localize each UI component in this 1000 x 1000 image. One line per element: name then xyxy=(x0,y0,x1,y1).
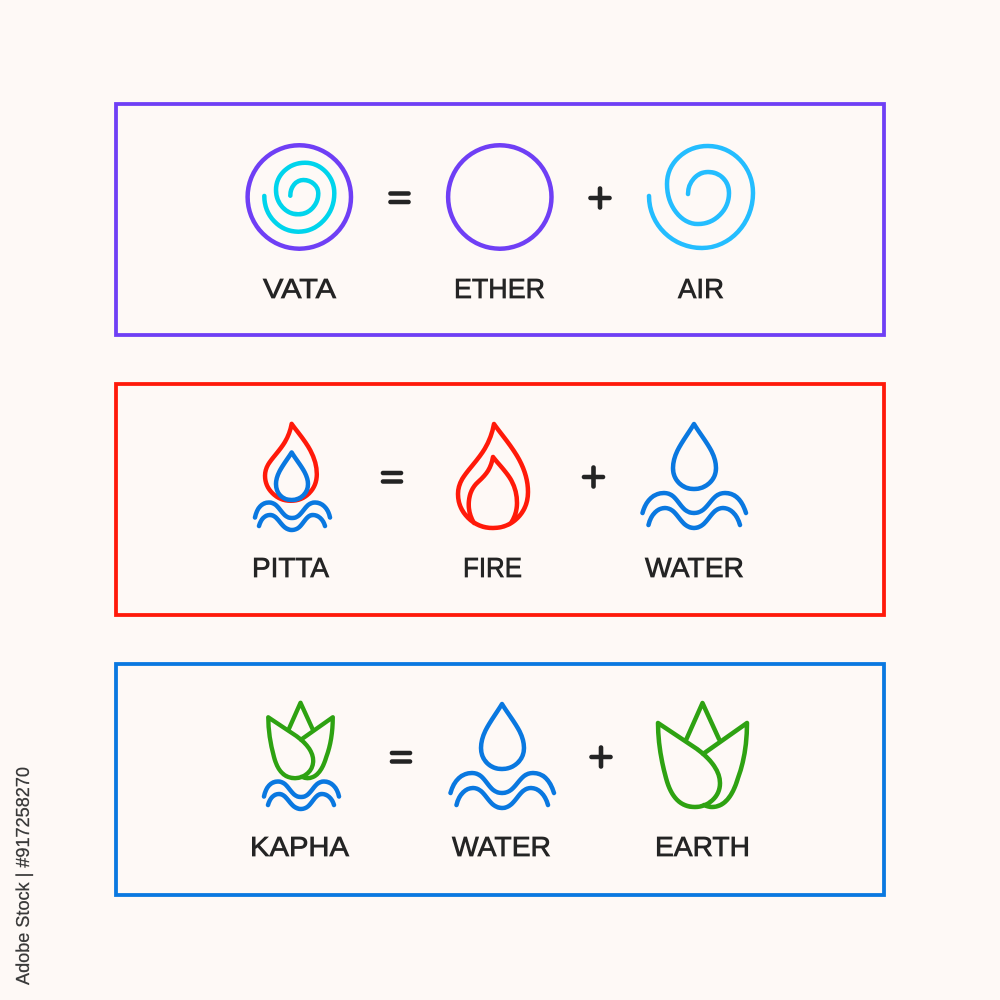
panel: vata xyxy=(116,104,884,335)
label: ether: ETHER xyxy=(454,273,545,304)
label: pitta: PITTA xyxy=(252,552,329,583)
label: water: WATER xyxy=(452,831,551,862)
icon: water xyxy=(642,424,746,528)
label: kapha: KAPHA xyxy=(250,831,349,862)
pitta frame xyxy=(116,384,884,615)
equals sign xyxy=(390,194,408,202)
plus sign xyxy=(592,748,610,766)
panel: pitta xyxy=(116,384,884,615)
plus sign xyxy=(584,468,603,486)
label: air: AIR xyxy=(678,273,724,304)
icon: kapha leaves and waves xyxy=(264,703,339,809)
label: vata: VATA xyxy=(263,273,336,304)
icon: water xyxy=(450,704,554,808)
label: fire: FIRE xyxy=(463,552,522,583)
label: earth: EARTH xyxy=(655,831,750,862)
vertical image credit: Adobe Stock | #917258270 xyxy=(12,767,33,985)
icon: air spiral xyxy=(649,146,753,248)
vata frame xyxy=(116,104,884,335)
plus sign xyxy=(590,188,610,208)
equals sign xyxy=(392,753,410,762)
icon: earth xyxy=(658,703,747,807)
label: water: WATER xyxy=(645,552,744,583)
icon: pitta flame, drop and waves xyxy=(255,424,330,530)
equals sign xyxy=(383,473,401,482)
panel: kapha xyxy=(116,664,884,895)
icon: fire xyxy=(458,424,528,528)
icon: vata circle with spiral xyxy=(248,145,351,249)
kapha frame xyxy=(116,664,884,895)
icon: ether circle xyxy=(448,145,552,249)
